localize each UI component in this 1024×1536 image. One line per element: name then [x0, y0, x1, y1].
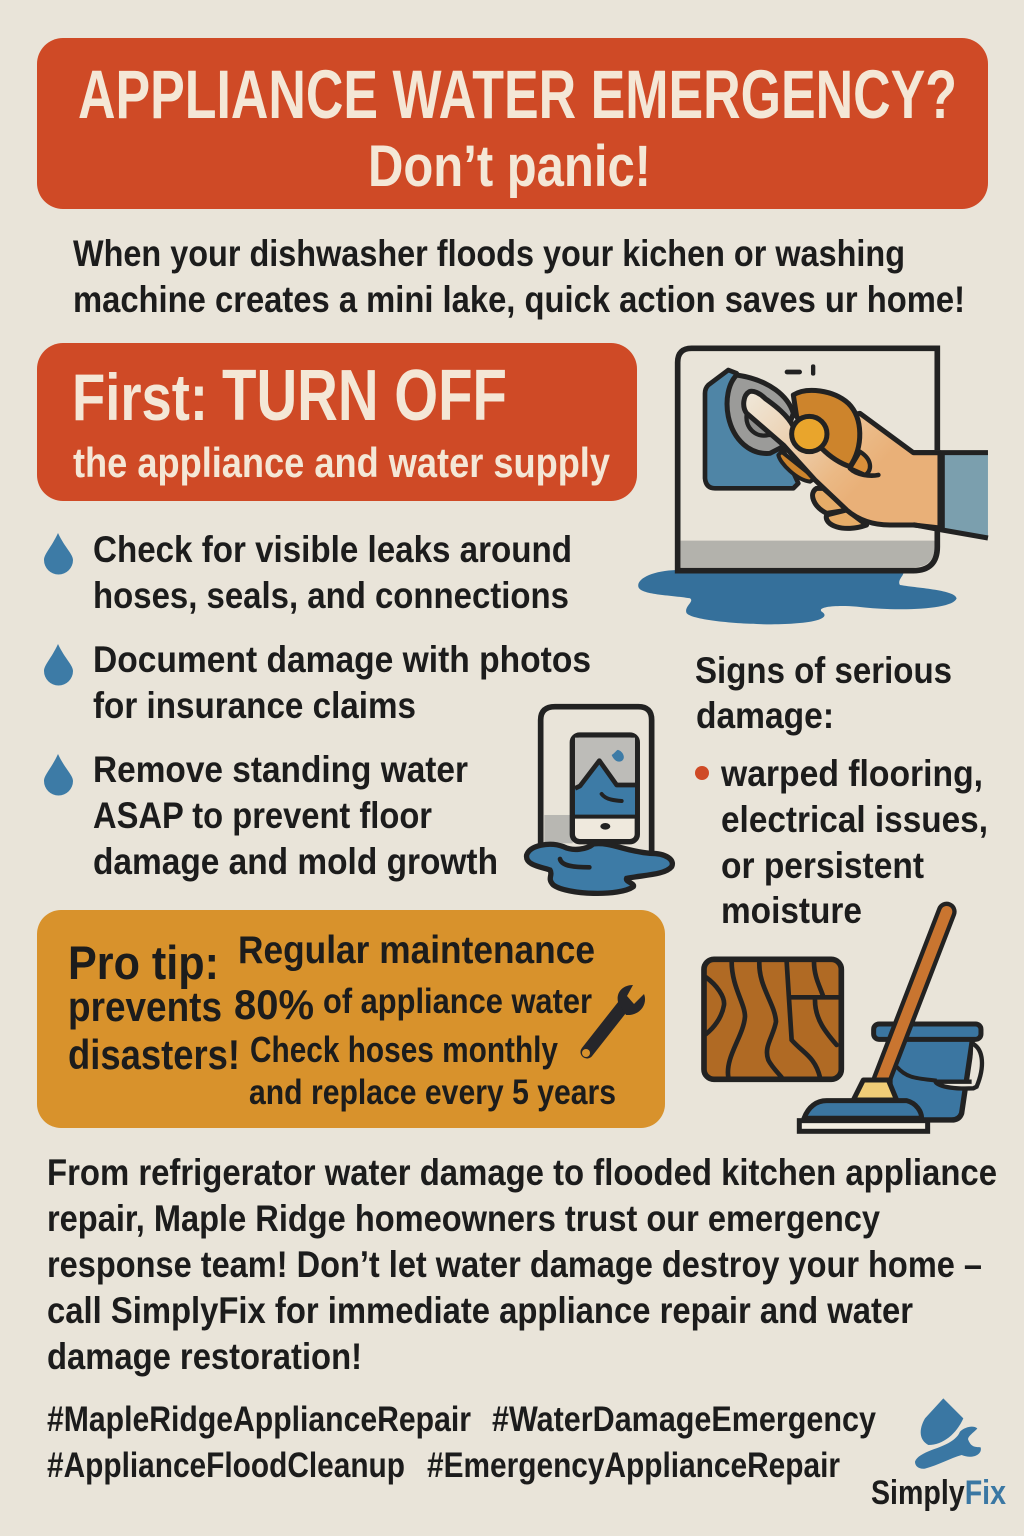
bullet: remove water [44, 749, 498, 882]
mop head [853, 1080, 897, 1100]
hashtags [47, 1400, 876, 1485]
heading: first turn off [72, 356, 507, 436]
hand [744, 391, 940, 528]
list text [720, 753, 988, 931]
list text: or persistent [721, 845, 924, 886]
list text: warped flooring, [720, 753, 983, 794]
bullet list [44, 529, 591, 882]
bullet: check leaks: hoses, seals, and connections [93, 575, 569, 616]
mop handle [882, 912, 947, 1080]
panel: pro tip [37, 910, 665, 1128]
wordmark: SimplyFix [871, 1474, 1006, 1512]
icon: wrench [582, 985, 645, 1057]
bullet: remove water: Remove standing water [93, 749, 468, 790]
logo: SimplyFix [871, 1398, 1006, 1512]
signs of serious damage [695, 650, 988, 931]
bullet: document damage: for insurance claims [93, 685, 416, 726]
tip text right: of appliance water [323, 982, 592, 1021]
intro text: When your dishwasher floods your kichen or washing [73, 233, 905, 274]
tip text left: Pro tip: [68, 936, 219, 989]
orange grip [793, 390, 860, 467]
panel: first step banner [37, 343, 637, 501]
hand and dial detail [705, 370, 940, 528]
list text: electrical issues, [721, 799, 988, 840]
sleeve [942, 453, 988, 537]
heading [695, 650, 952, 736]
hashtags: #ApplianceFloodCleanup [47, 1446, 405, 1485]
illustration: mop and bucket [799, 912, 982, 1131]
tip text right: Check hoses monthly [250, 1029, 558, 1070]
list text: moisture [721, 890, 862, 931]
closing paragraph [47, 1152, 997, 1377]
lower fingers [813, 488, 848, 513]
tip text right: 80% [234, 981, 314, 1028]
control panel [705, 370, 798, 488]
closing paragraph: call SimplyFix for immediate appliance repair and water [47, 1290, 913, 1331]
bullet: remove water: damage and mold growth [93, 841, 498, 882]
icon: phone documenting flood [527, 707, 672, 893]
header banner [37, 38, 988, 209]
tip text right [234, 929, 616, 1112]
subheading: the appliance and water supply [73, 439, 611, 486]
puddle [638, 570, 957, 624]
heading: first turn off: First: [72, 360, 208, 434]
heading: first turn off: TURN OFF [222, 356, 507, 436]
lower orange edge [778, 452, 815, 482]
tip text right: and replace every 5 years [249, 1073, 616, 1112]
heading: damage: [696, 695, 834, 736]
hashtags: #MapleRidgeApplianceRepair [47, 1400, 471, 1439]
tip text left: prevents [68, 983, 222, 1030]
closing paragraph: repair, Maple Ridge homeowners trust our emergency [47, 1198, 880, 1239]
bullet: document damage: Document damage with photos [93, 639, 591, 680]
hashtags: #EmergencyApplianceRepair [427, 1446, 840, 1485]
phone [572, 735, 637, 842]
bullet: check leaks [44, 529, 572, 616]
icon: drop and wrench [915, 1398, 981, 1469]
subtitle: Don’t panic! [368, 134, 651, 199]
closing paragraph: damage restoration! [47, 1336, 362, 1377]
puddle [527, 844, 672, 893]
red bullet [695, 766, 709, 780]
knuckle [850, 452, 870, 475]
tip text left: disasters! [68, 1031, 240, 1078]
bullet: remove water: ASAP to prevent floor [93, 795, 432, 836]
tip text left [68, 936, 240, 1078]
illustration: warped wood floor [704, 959, 841, 1079]
bullet: check leaks: Check for visible leaks around [93, 529, 572, 570]
intro text [73, 233, 965, 320]
hashtags: #WaterDamageEmergency [492, 1400, 876, 1439]
appliance body [678, 348, 937, 571]
dial ring [727, 375, 793, 453]
illustration: hand turning off appliance [638, 348, 988, 624]
tip text right: Regular maintenance [238, 929, 595, 972]
bullet: document damage [44, 639, 591, 726]
heading: Signs of serious [695, 650, 952, 691]
bucket [890, 1038, 973, 1120]
